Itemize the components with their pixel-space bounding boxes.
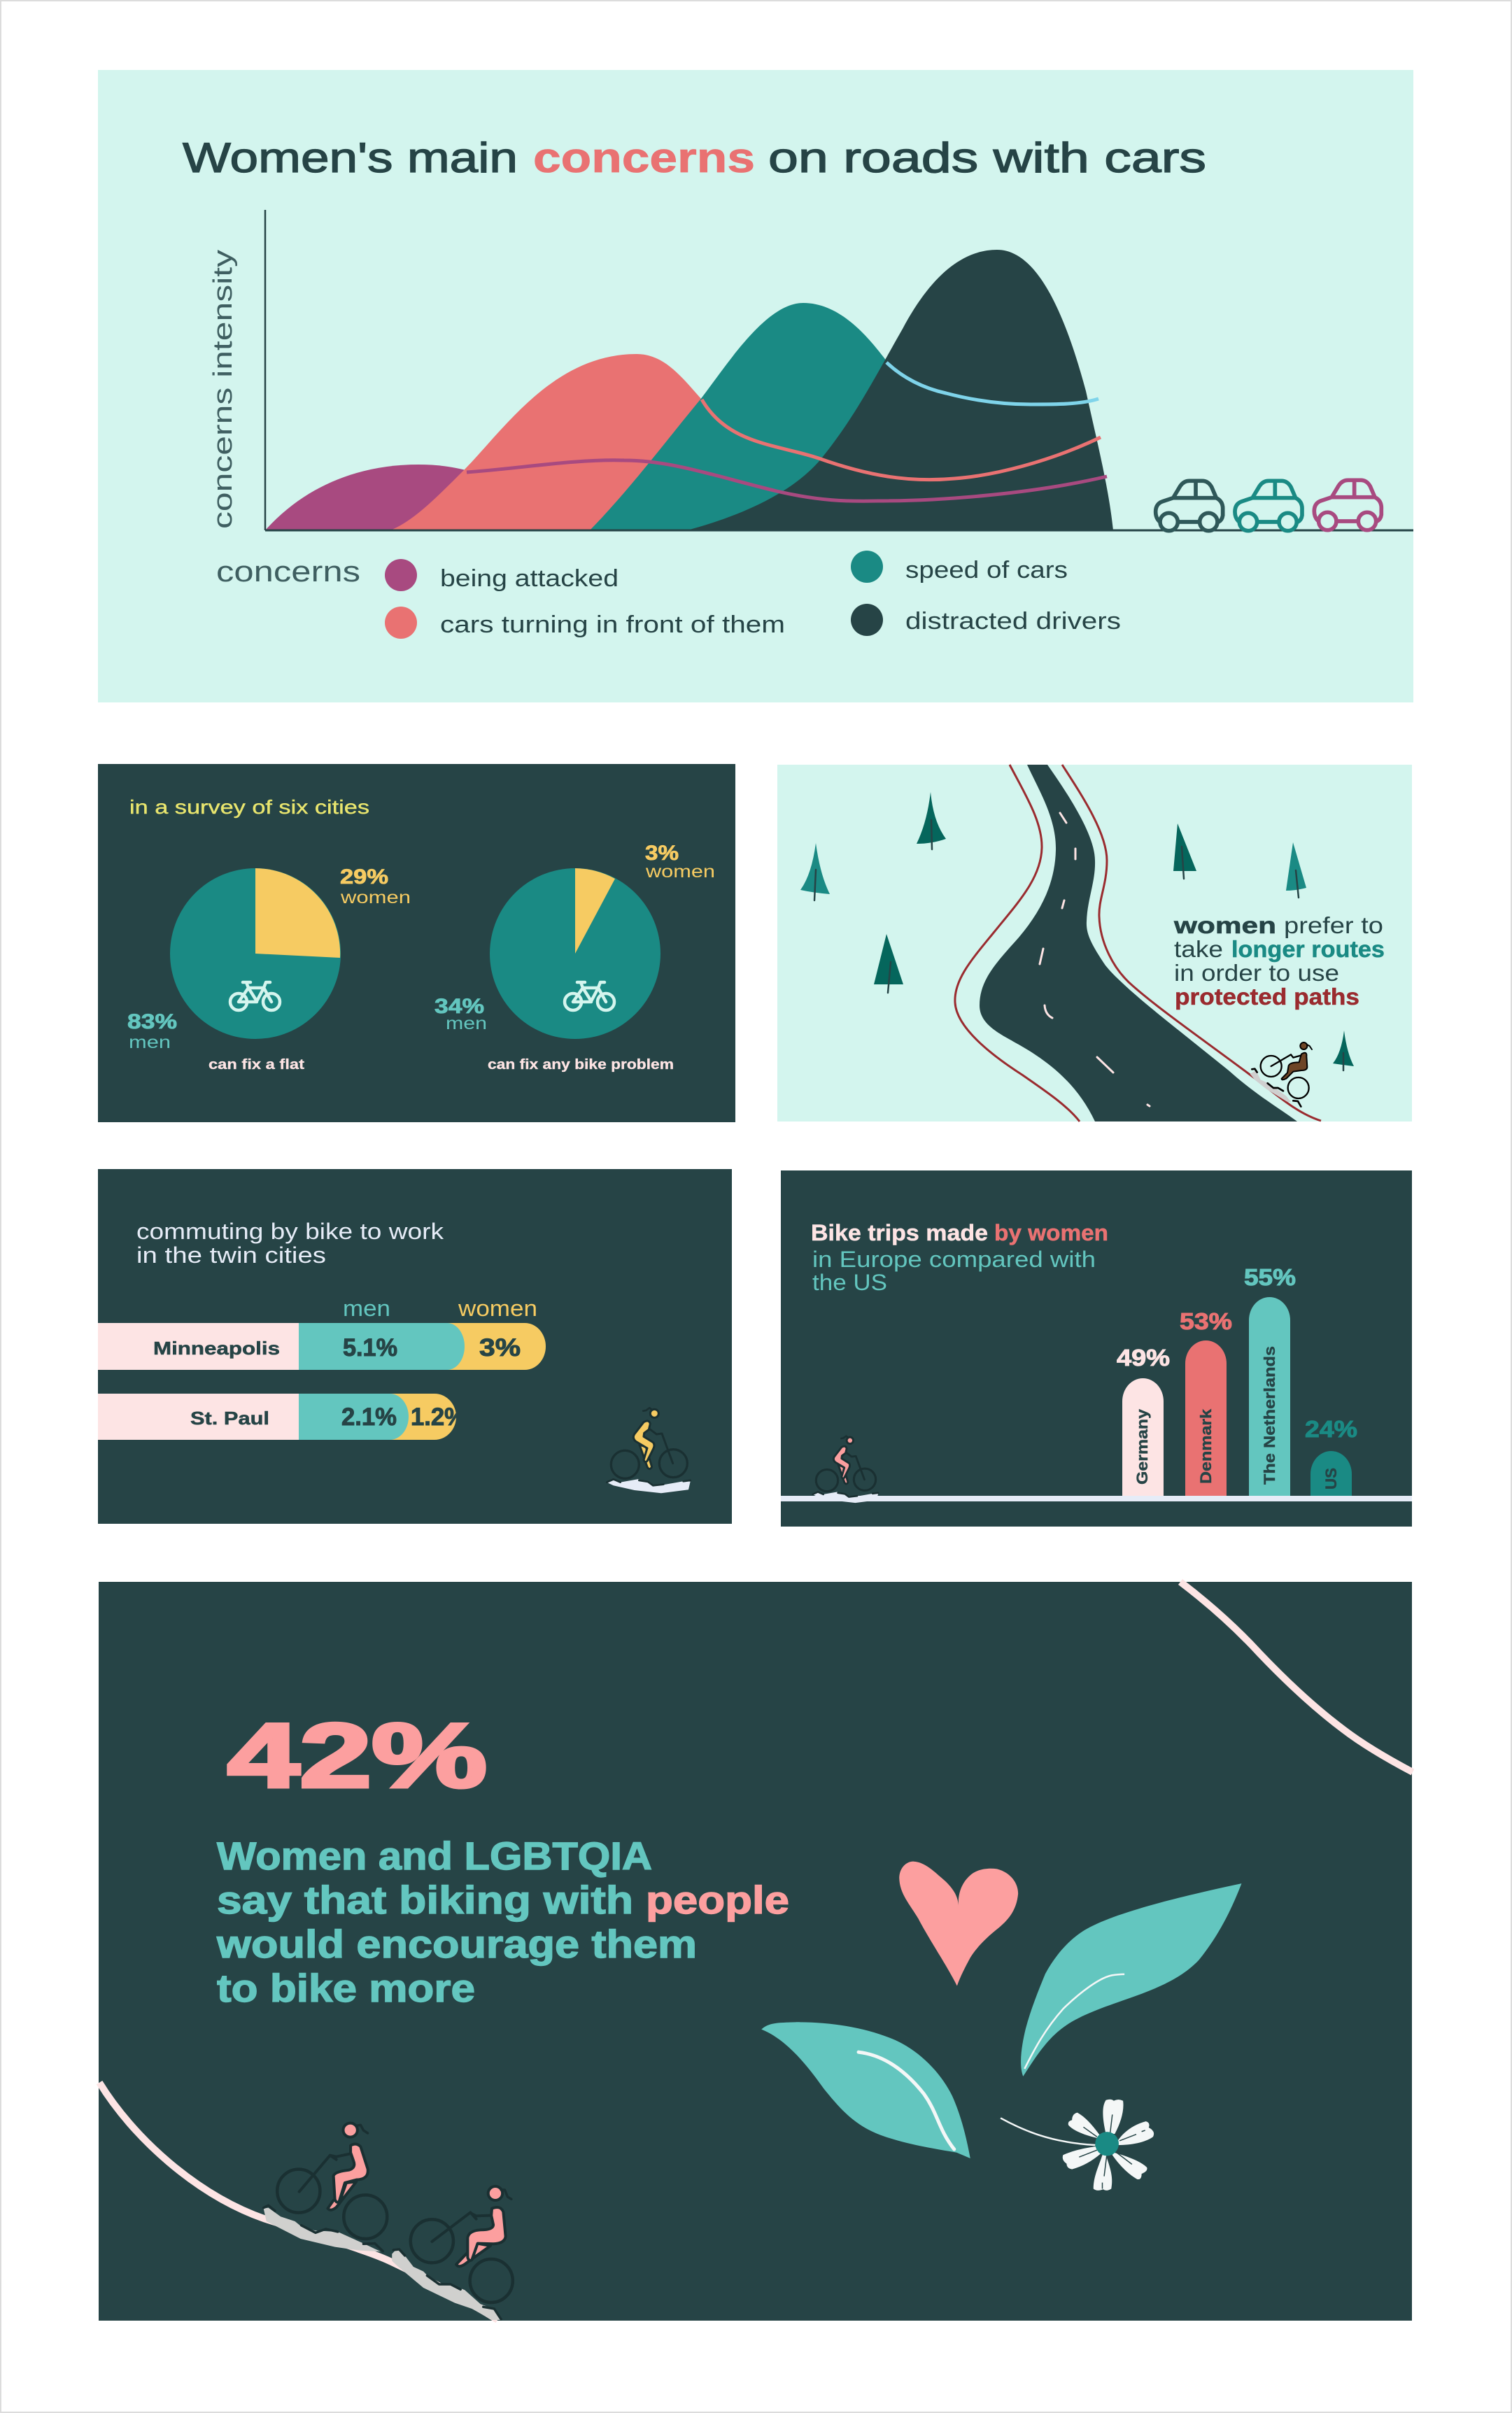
bar: The Netherlands: The Netherlands	[1261, 1346, 1278, 1485]
trees	[800, 792, 1354, 1070]
icon: cyclist on slope	[1250, 1042, 1312, 1107]
pie chart: can fix any bike problem	[490, 868, 660, 1039]
icon: yellow cyclist	[607, 1408, 691, 1493]
panel: women's main concerns	[98, 70, 1413, 702]
bar: Minneapolis: 5.1%	[343, 1334, 397, 1361]
pie chart: can fix a flat	[170, 868, 341, 1039]
illustration: heart, leaves, flower	[761, 1862, 1241, 2191]
icon: purple car	[1314, 480, 1381, 530]
bar legend: women	[458, 1296, 537, 1321]
pie labels: 83%	[127, 1010, 177, 1033]
pie labels: can fix a flat	[209, 1057, 304, 1073]
tree	[874, 934, 903, 993]
pie labels: 3%	[645, 842, 679, 865]
hill line	[99, 2083, 497, 2320]
bar: Germany	[1117, 1345, 1170, 1497]
ground line	[781, 1496, 1412, 1501]
legend: cars turning in front of them	[440, 611, 785, 638]
pie labels: women	[340, 888, 411, 907]
icon: pink cyclist	[813, 1436, 878, 1503]
statement	[216, 1834, 789, 2010]
bar: St. Paul: 1.2%	[411, 1403, 466, 1431]
bar: St. Paul: St. Paul	[190, 1408, 269, 1429]
bar: Minneapolis	[98, 1323, 546, 1370]
icon: bicycle	[565, 982, 614, 1010]
panel: survey of six cities	[98, 764, 735, 1122]
text: longer routes: in order to use	[1174, 960, 1339, 986]
axes	[265, 210, 1413, 530]
bar: Denmark: 53%	[1180, 1308, 1232, 1334]
road dashes	[1040, 813, 1150, 1106]
title: Women's main	[183, 134, 518, 181]
panel: 42 percent	[99, 1582, 1413, 2321]
icon: right leaf	[1021, 1883, 1241, 2076]
title: on roads with cars	[768, 134, 1206, 181]
legend: concerns	[216, 555, 360, 588]
pie labels: women	[645, 862, 715, 882]
legend: speed of cars	[905, 557, 1068, 583]
pie labels: men	[129, 1033, 171, 1052]
tree	[800, 843, 830, 900]
pie labels: men	[446, 1014, 487, 1033]
bar chart	[1117, 1264, 1357, 1497]
icon: flower	[1001, 2100, 1154, 2191]
legend: distracted drivers	[905, 608, 1121, 635]
panel: commuting in the twin cities	[98, 1169, 732, 1524]
statement: to bike more	[217, 1966, 475, 2010]
bar: St. Paul: 2.1%	[341, 1403, 397, 1431]
cyclist	[277, 2123, 387, 2239]
bar: US: US	[1322, 1468, 1340, 1489]
tree	[1333, 1031, 1354, 1070]
bar: Germany: 49%	[1117, 1345, 1170, 1371]
heading: in a survey of six cities	[129, 796, 369, 818]
statement: say that biking with	[217, 1878, 633, 1922]
statement: Women and LGBTQIA	[217, 1834, 652, 1878]
heading: in the twin cities	[136, 1243, 326, 1268]
icon: left leaf	[761, 2022, 970, 2158]
bar: The Netherlands: 55%	[1244, 1264, 1296, 1290]
text: longer routes	[1173, 912, 1385, 1010]
icon: cars	[1156, 480, 1381, 531]
big number: 42%	[227, 1704, 487, 1806]
icon: heart	[899, 1862, 1018, 1986]
protected paths	[955, 765, 1321, 1121]
heading	[136, 1219, 444, 1268]
road	[980, 765, 1297, 1121]
tree	[917, 792, 946, 849]
bar: US: 24%	[1305, 1416, 1357, 1442]
text: longer routes: longer routes	[1231, 936, 1385, 962]
icon: dark car	[1156, 481, 1223, 531]
tree	[1173, 823, 1196, 879]
text: longer routes: take	[1174, 936, 1223, 962]
bar: US	[1305, 1416, 1357, 1497]
bar: St. Paul	[98, 1394, 466, 1440]
bar: Denmark: Denmark	[1197, 1408, 1215, 1484]
area chart	[265, 250, 1113, 530]
pie labels: 29%	[340, 865, 388, 889]
legend	[216, 551, 1121, 639]
statement: would encourage them	[216, 1922, 697, 1966]
bar: Minneapolis: 3%	[479, 1334, 521, 1361]
title: concerns	[533, 134, 755, 181]
heading: Bike trips made	[811, 1220, 988, 1245]
icon: teal car	[1235, 481, 1302, 531]
text: longer routes: protected paths	[1175, 984, 1359, 1010]
pie labels: can fix any bike problem	[488, 1057, 674, 1073]
heading: by women	[994, 1220, 1108, 1245]
icon: bicycle	[230, 982, 280, 1010]
pie labels	[127, 842, 715, 1073]
cyclist	[411, 2186, 513, 2302]
legend: being attacked	[440, 565, 619, 592]
heading	[811, 1220, 1108, 1295]
title	[183, 134, 1206, 181]
tree	[1286, 842, 1306, 898]
text: longer routes: prefer to	[1284, 912, 1383, 938]
statement: people	[646, 1878, 789, 1922]
panel: longer routes	[777, 765, 1412, 1121]
decorative curve: top right	[1180, 1582, 1413, 1772]
heading: commuting by bike to work	[136, 1219, 444, 1244]
illustration: cyclists on hill	[99, 2083, 513, 2320]
bar legend	[343, 1296, 537, 1321]
pie labels: 34%	[434, 995, 484, 1018]
bar: Germany: Germany	[1133, 1408, 1151, 1485]
heading: the US	[812, 1270, 887, 1295]
y axis label: concerns intensity	[209, 250, 238, 529]
rocks on hill	[264, 2205, 501, 2320]
bar: The Netherlands	[1244, 1264, 1296, 1497]
bar: Denmark	[1180, 1308, 1232, 1497]
text: longer routes: women	[1173, 912, 1276, 938]
heading: in Europe compared with	[812, 1247, 1096, 1272]
bar legend: men	[343, 1296, 390, 1321]
panel: bike trips by women	[781, 1170, 1412, 1527]
bar: Minneapolis: Minneapolis	[153, 1338, 280, 1359]
